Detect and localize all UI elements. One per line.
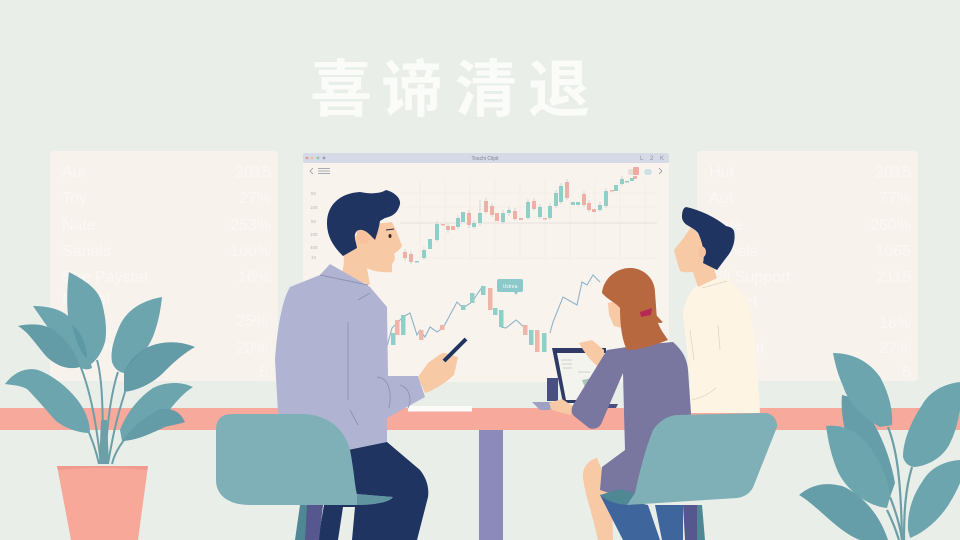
ear [698,246,706,258]
panel: right data table: Student [709,340,765,357]
panel: left data table: 5 [259,364,268,381]
panel: left data table: 2015 [235,164,271,181]
shirt creases [320,275,410,425]
panel: left data table: Aur [62,164,88,181]
panel: right data table: Market [709,293,758,310]
y axis labels: 10 [311,255,317,260]
y axis labels: 400 [310,245,318,250]
panel: right data table: Aut [709,190,734,207]
neck and face [340,222,402,285]
face and neck [674,226,717,287]
phone [444,339,466,361]
paper on table [408,406,472,412]
screen title bar: 2 [650,156,654,162]
panel: left data table: 20% [236,340,268,357]
title: 喜 [310,56,372,125]
panel: right data table: 18% [879,315,911,332]
person: woman with tablet [532,268,777,540]
y axis labels: 100 [310,232,318,237]
screen title bar: K [660,156,664,162]
panel: left data table: Sue Paystat [62,269,149,286]
plant stems [80,360,125,464]
panel: right data table: 260% [870,217,911,234]
panel: right data table: Sanels [709,243,758,260]
plant stems [887,427,912,540]
dress [572,342,691,500]
panel: left data table [50,151,278,381]
panel: left data table: 100% [230,243,271,260]
panel: right data table: 27% [879,340,911,357]
panel: right data table: 77% [879,190,911,207]
panel: left data table: Sanels [62,243,111,260]
panel: right data table [697,151,918,381]
hand [418,353,458,393]
candlestick chart: upper [403,176,637,264]
y axis labels: 100 [310,205,318,210]
hair [327,190,400,256]
hand on tablet [579,340,604,368]
panel: left data table: 253% [230,217,271,234]
chair [216,414,393,540]
panel: left data table: 27% [239,190,271,207]
hair tie and ponytail [640,308,663,323]
shirt [683,278,760,413]
eye and brow [386,229,394,238]
chart tooltip bubble: Ustrea [503,284,518,290]
plant: right [799,353,960,540]
table top [0,408,960,430]
chart tooltip bubble [497,279,523,295]
person: man with phone [216,190,466,540]
panel: left data table: 16% [238,269,270,286]
chair [600,413,777,505]
title: 退 [528,56,590,125]
panel: right data table: 2015 [875,164,911,181]
person: man standing right [674,207,760,413]
panel: left data table: Student [62,339,118,356]
panel: right data table: 1065 [875,243,911,260]
y axis labels [310,191,318,260]
trousers [318,442,428,540]
panel: right data table: 2115 [877,269,911,286]
panel: left data table: Nate [62,217,96,234]
title: 清 [455,56,517,125]
shirt [275,264,425,450]
ear [357,230,370,244]
plant: left [5,272,195,540]
dark stand behind tablet [547,378,558,401]
shirt creases [690,281,727,400]
plant leaf shading [72,325,143,372]
line and candlestick chart: lower [386,275,600,352]
panel: central chart screen [303,153,669,382]
panel: right data table: 5 [902,364,911,381]
plant pot [57,466,148,540]
hair [682,207,735,270]
title: 谛 [381,56,443,125]
panel: right data table: Smart [709,315,752,332]
lower hand [549,399,574,415]
title [310,56,590,125]
y axis labels: 50 [311,191,317,196]
panel: left data table: Market [62,291,111,308]
y axis labels: 50 [311,219,317,224]
navigation controls [310,167,662,175]
panel: right data table: Hut [709,164,734,181]
panel: left data table: 25% [236,313,268,330]
leg [583,458,613,540]
panel: right data table: Panels [709,364,758,381]
jeans [600,495,683,540]
screen title bar: Touchi Clipit [472,156,499,162]
panel: right data table: Nate [709,217,743,234]
face [608,300,622,328]
hair [602,268,668,350]
table leg [479,430,503,540]
screen title bar: L [640,156,644,162]
screen title bar [303,153,669,163]
panel: right data table: Bill Support [709,269,791,286]
tablet [532,348,618,410]
panel: left data table: Cart [62,315,93,332]
chart grid [400,180,657,260]
panel: left data table: Toy [62,190,87,207]
